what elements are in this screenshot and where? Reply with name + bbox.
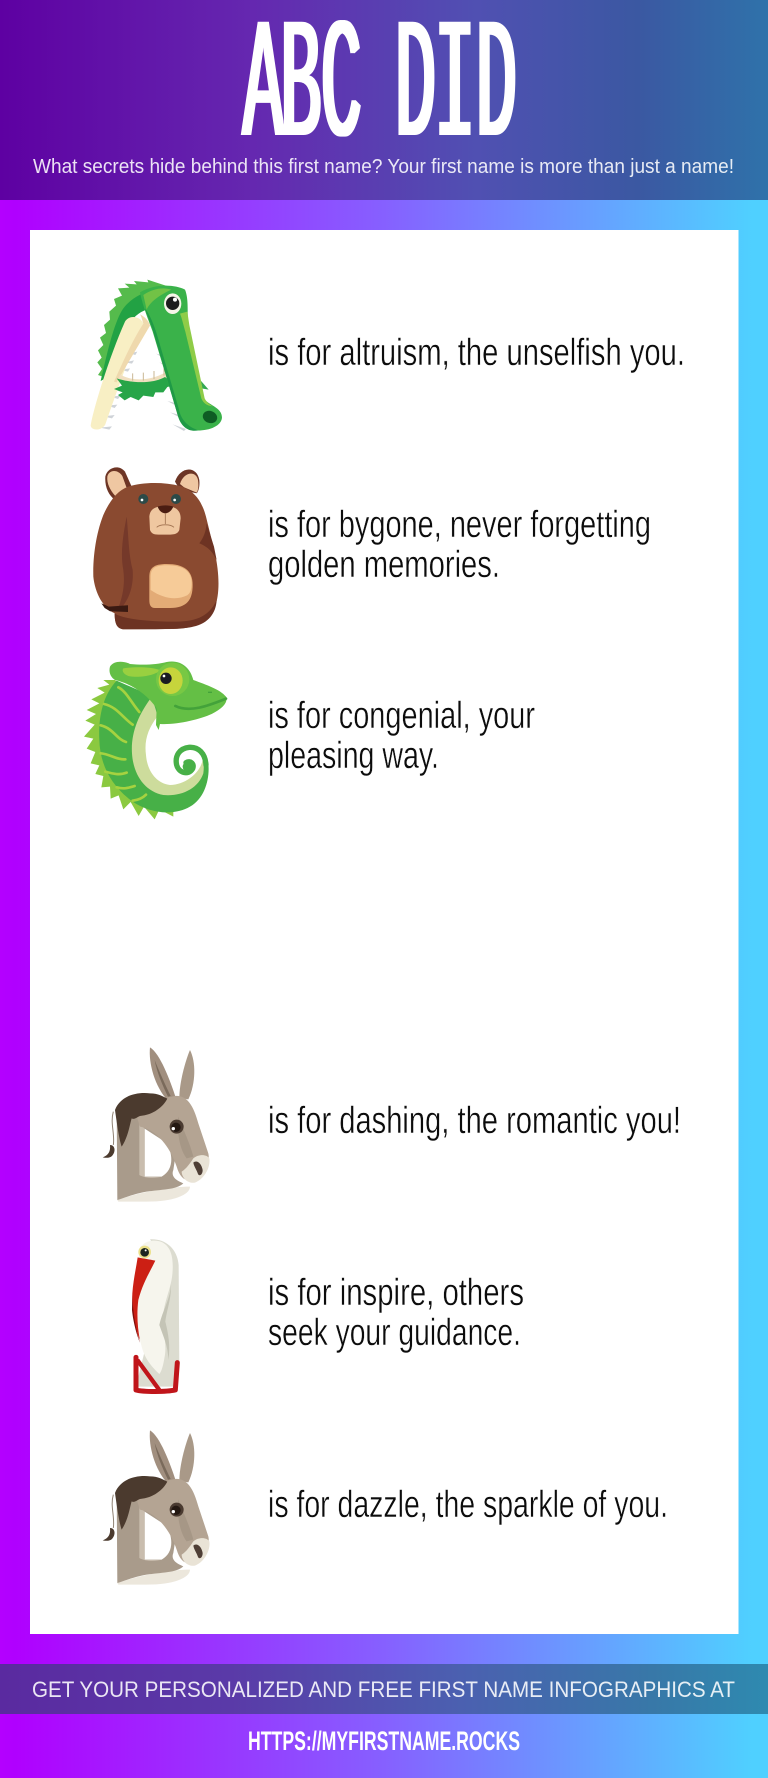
- panel: white card: [30, 230, 738, 1634]
- footer band: [0, 1664, 768, 1714]
- row: letter I: seek your guidance.: [268, 1312, 521, 1354]
- icon: stork letter I: [132, 1239, 179, 1391]
- row: letter B: golden memories.: [268, 544, 500, 586]
- footer url: HTTPS://MYFIRSTNAME.ROCKS: [248, 1726, 520, 1756]
- row: letter I: [132, 1239, 524, 1391]
- row: letter C: pleasing way.: [268, 735, 439, 777]
- icon: alligator letter A: [91, 280, 222, 431]
- icon: donkey letter D (repeat): [103, 1430, 210, 1585]
- icon: chameleon letter C: [84, 661, 227, 819]
- text: B: is for bygone, never forgetting: [268, 504, 651, 546]
- tail spiral: [176, 747, 206, 773]
- row: letter B: [93, 467, 651, 629]
- row: letter D: [103, 1047, 681, 1202]
- icon: donkey letter D: [103, 1047, 210, 1202]
- row: letter A: [91, 280, 685, 431]
- icon: bear letter B: [93, 467, 218, 629]
- header band: [0, 0, 768, 200]
- footer call to action: GET YOUR PERSONALIZED AND FREE FIRST NAME INFOGRAPHICS AT: [32, 1677, 735, 1702]
- header: [0, 0, 768, 200]
- row: letter C: [84, 661, 535, 819]
- footer: [0, 1664, 768, 1756]
- subtitle: What secrets hide behind this first name? Your first name is more than just a name!: [33, 155, 734, 178]
- text: C: is for congenial, your: [268, 695, 535, 737]
- text: I: is for inspire, others: [268, 1272, 524, 1314]
- row: second letter D: [103, 1430, 668, 1585]
